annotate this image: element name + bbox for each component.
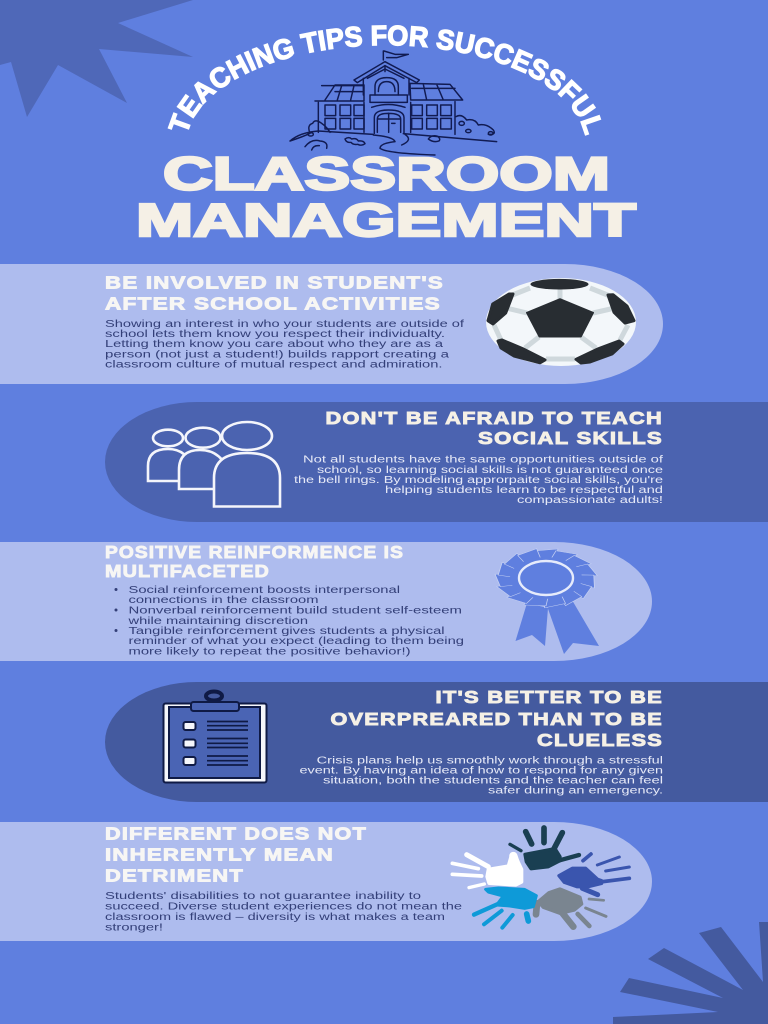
body text: helping students learn to be respectful and bbox=[385, 485, 663, 496]
bullet list: reminder of what you expect (leading to them being bbox=[128, 636, 464, 647]
body text: the bell rings. By modeling approrpaite social skills, you're bbox=[294, 475, 664, 486]
body text: Letting them know you care about who they are as a bbox=[105, 339, 444, 350]
body text bbox=[294, 454, 664, 506]
body text bbox=[105, 319, 464, 370]
body text: person (not just a student!) builds rapport creating a bbox=[105, 350, 450, 360]
decorative burst: bottom right bbox=[613, 922, 768, 1024]
heading bbox=[105, 272, 444, 314]
panel: after school activities bbox=[0, 264, 663, 384]
body text: stronger! bbox=[105, 922, 163, 933]
icon: clipboard bbox=[164, 692, 266, 782]
bullet list: while maintaining discretion bbox=[127, 616, 308, 627]
icon: school building bbox=[290, 51, 497, 155]
title bbox=[136, 148, 636, 246]
body text: school lets them know you respect their individualty. bbox=[105, 329, 445, 340]
icon: award ribbon bbox=[495, 549, 599, 654]
heading bbox=[326, 408, 663, 448]
body text: compassionate adults! bbox=[517, 495, 663, 506]
body text: Not all students have the same opportunities outside of bbox=[303, 454, 663, 466]
heading: DETRIMENT bbox=[105, 866, 244, 886]
bullet list: Tangible reinforcement gives students a physical bbox=[128, 626, 444, 637]
body text: Students' disabilities to not guarantee inability to bbox=[105, 891, 422, 902]
heading: BE INVOLVED IN STUDENT'S bbox=[105, 272, 444, 292]
curved subtitle: TEACHING TIPS FOR SUCCESSFUL bbox=[168, 25, 602, 136]
body text: classroom is flawed – diversity is what makes a team bbox=[105, 912, 445, 923]
body text bbox=[300, 756, 663, 796]
heading: MULTIFACETED bbox=[105, 561, 270, 581]
title: CLASSROOM bbox=[163, 148, 610, 200]
bullet list: more likely to repeat the positive behavior!) bbox=[128, 646, 410, 658]
heading: POSITIVE REINFORMENCE IS bbox=[105, 542, 404, 562]
body text: Crisis plans help us smoothly work through a stressful bbox=[317, 756, 663, 766]
panel: social skills bbox=[105, 402, 768, 522]
decorative star: top left bbox=[0, 0, 193, 117]
body text: classroom culture of mutual respect and admiration. bbox=[105, 360, 442, 370]
heading: OVERPREARED THAN TO BE bbox=[330, 709, 663, 729]
body text: Showing an interest in who your students are outside of bbox=[105, 319, 464, 330]
heading: DON'T BE AFRAID TO TEACH bbox=[326, 408, 663, 428]
body text bbox=[105, 891, 463, 933]
body text: event. By having an idea of how to respond for any given bbox=[300, 766, 663, 776]
bullet list bbox=[114, 585, 464, 658]
title: MANAGEMENT bbox=[136, 194, 636, 246]
heading: INHERENTLY MEAN bbox=[105, 845, 334, 865]
icon: circle of hands bbox=[452, 828, 629, 928]
heading: SOCIAL SKILLS bbox=[478, 428, 663, 448]
bullet list: Social reinforcement boosts interpersonal bbox=[128, 585, 400, 596]
icon: three people bbox=[148, 422, 280, 506]
panel: positive reinforcement bbox=[0, 542, 652, 661]
bullet list: Nonverbal reinforcement build student self-esteem bbox=[128, 606, 462, 616]
heading: CLUELESS bbox=[537, 730, 663, 750]
body text: safer during an emergency. bbox=[488, 786, 663, 796]
body text: succeed. Diverse student experiences do not mean the bbox=[105, 901, 463, 912]
icon: soccer ball bbox=[486, 278, 636, 366]
panel: diversity bbox=[0, 822, 652, 941]
bullet list: connections in the classroom bbox=[128, 595, 318, 606]
body text: situation, both the students and the teacher can feel bbox=[323, 776, 663, 786]
panel: overprepared bbox=[105, 682, 768, 802]
heading: DIFFERENT DOES NOT bbox=[105, 824, 367, 844]
body text: school, so learning social skills is not guaranteed once bbox=[317, 465, 664, 476]
heading bbox=[330, 687, 663, 750]
heading bbox=[105, 542, 404, 581]
heading: AFTER SCHOOL ACTIVITIES bbox=[105, 294, 441, 314]
heading: IT'S BETTER TO BE bbox=[436, 687, 663, 707]
heading bbox=[105, 824, 367, 886]
